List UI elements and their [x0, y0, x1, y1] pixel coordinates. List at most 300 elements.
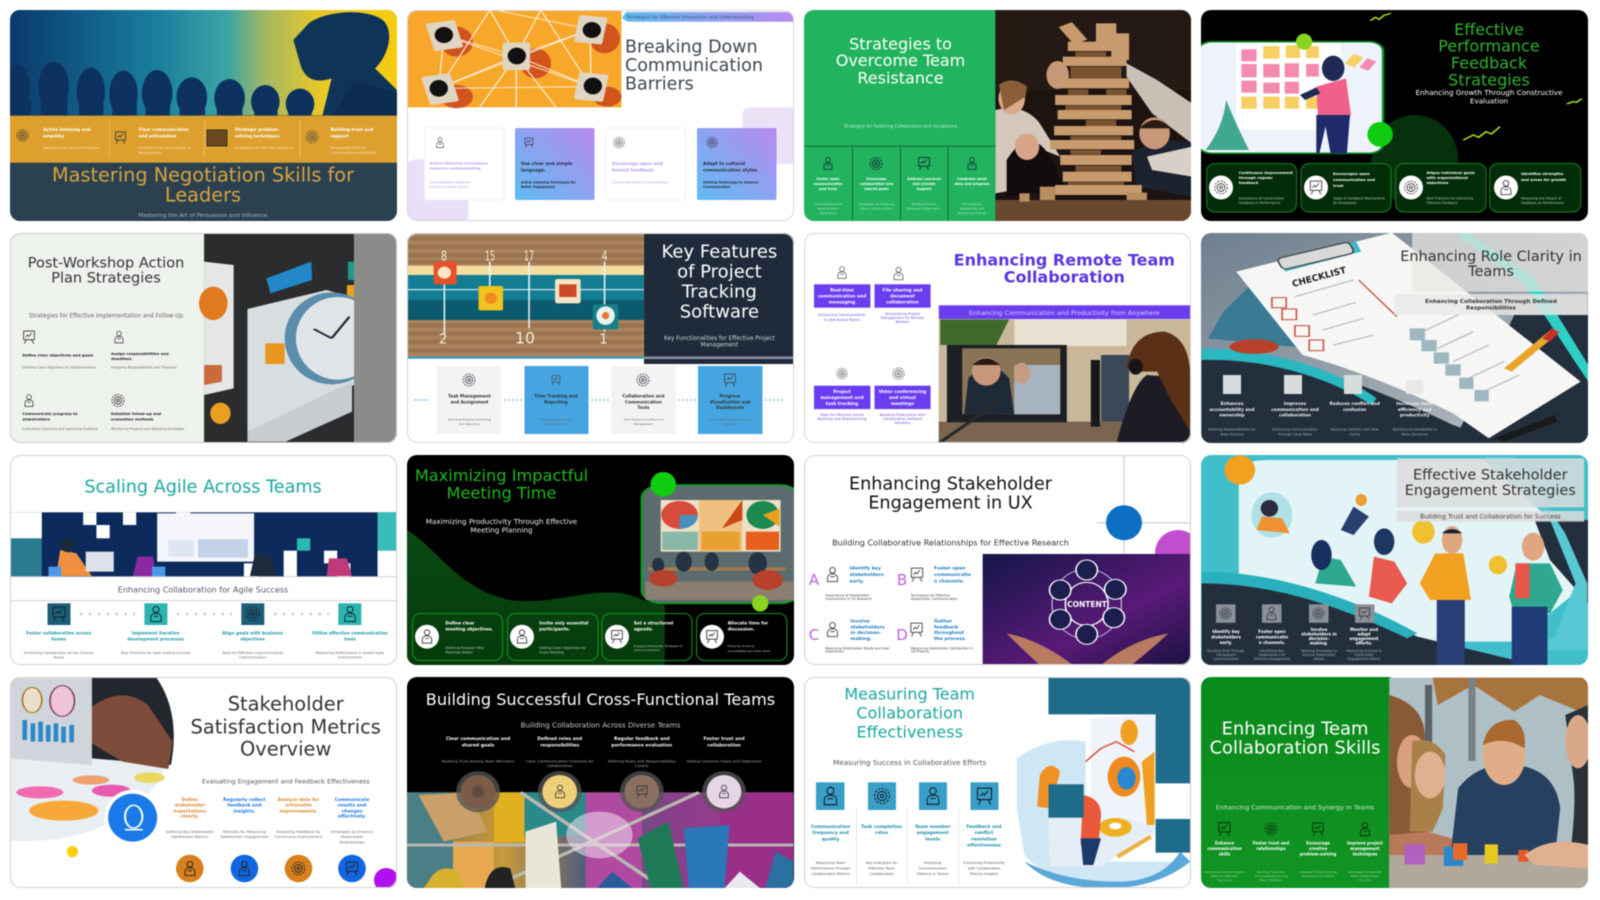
- text: metric subtitles: Effective Team: [868, 866, 895, 870]
- subtitle: Measuring Success in Collaborative Efforts: [833, 758, 986, 767]
- title: Satisfaction Metrics: [191, 715, 381, 738]
- text: practice subtitles: Management for Remote: [881, 316, 924, 320]
- text: metric titles: Team member: [915, 824, 951, 830]
- text: strategy titles: collaboration and: [860, 182, 894, 186]
- text: practice subtitles: [445, 644, 771, 654]
- icons: four metrics: [816, 782, 998, 810]
- subtitle: Enhancing Growth Through Constructive: [1415, 88, 1563, 97]
- text: skill titles: [43, 127, 373, 138]
- card: active listening: [424, 128, 504, 200]
- title: Performance: [1438, 37, 1540, 56]
- text: tactic titles: throughout: [934, 630, 965, 636]
- text: benefit subtitles: Effective Feedback: [1426, 201, 1458, 205]
- text: tactic titles: early.: [850, 578, 864, 584]
- card: honest feedback: [606, 128, 686, 200]
- text: agile step subtitles: [24, 651, 384, 659]
- text: action item titles: deadlines: [111, 356, 132, 361]
- text: strategy titles: support: [917, 187, 932, 191]
- shape: blue circle: [1106, 505, 1142, 540]
- image: team on scaffolding: [407, 771, 793, 889]
- subtitle: Evaluating Engagement and Feedback Effectiveness: [202, 777, 370, 785]
- text: tactic titles: early.: [1220, 640, 1233, 645]
- text: tactic subtitles: Measuring Stakeholder Satisfaction in: [911, 646, 973, 650]
- title: Breaking Down: [625, 38, 758, 58]
- text: strategy titles: shared goals: [864, 187, 889, 191]
- title: [844, 684, 975, 741]
- text: tactic titles: stakeholders in: [1301, 632, 1337, 636]
- text: practice titles: communication and: [818, 294, 866, 300]
- image: isometric clock and calendar: [199, 232, 400, 445]
- letters A B C D: C: [809, 626, 819, 644]
- title: Overcome Team: [836, 51, 965, 70]
- text: feature titles: Dashboards: [716, 405, 745, 410]
- text: agile step subtitles: Best Practices for Agile Scaling Success: [121, 651, 190, 655]
- text: agile step titles: objectives: [240, 636, 265, 642]
- image: person at sticky note board: [1198, 13, 1582, 205]
- text: feature titles: Reporting: [544, 399, 568, 404]
- text: action item titles: Assign responsibilities and: [111, 351, 169, 356]
- text: skill subtitles: Strategies for Win-Win Solutions: [235, 146, 293, 150]
- text: skill titles: Encourage: [1306, 840, 1330, 845]
- card: clear language: Better Engagement: [521, 185, 556, 189]
- text: feature titles: [448, 394, 750, 410]
- title: Collaboration: [856, 703, 963, 722]
- banner: subtitle: [622, 12, 794, 22]
- text: practice titles: and virtual: [889, 395, 916, 401]
- title: [191, 693, 381, 760]
- text: metric titles: conflict: [975, 830, 994, 836]
- panel: Enhancing Stakeholder Engagement in UX: [804, 455, 1201, 666]
- text: metric subtitles: Collaboration Metrics: [812, 872, 850, 876]
- text: skill titles: Clear communication: [139, 127, 189, 132]
- title: Effective Stakeholder: [1413, 467, 1568, 483]
- image: smiley card and sticky notes in circle: [10, 675, 398, 892]
- title: Overview: [240, 737, 331, 760]
- text: practice titles: meetings: [891, 401, 914, 407]
- text: metric titles: engagement: [917, 830, 949, 836]
- text: tactic titles: stakeholders: [850, 624, 885, 630]
- text: benefit subtitles: Best Practices for Delivering: [1426, 196, 1473, 200]
- panel: dark title block: Management: [701, 343, 739, 349]
- text: practice subtitles: Follow-Up: Ensuring: [728, 644, 754, 648]
- icon: graduation cap: [116, 132, 126, 144]
- text: tactic titles: n channels.: [934, 578, 964, 584]
- text: action item subtitles: Defining Clear Objectives for Implementation: [22, 365, 96, 369]
- text: agile step titles: tools: [344, 636, 356, 642]
- text: practice subtitles: Active Involvement: [634, 648, 660, 652]
- card: active listening: Communication Styles: [430, 185, 468, 189]
- text: action item titles: Communicate progress to: [22, 411, 78, 416]
- text: practice titles: task tracking: [826, 401, 858, 407]
- text: benefit subtitles: Boosting Accountability in: [1393, 428, 1437, 432]
- numbers on timeline: 8: [441, 248, 447, 264]
- text: metric titles: [173, 797, 369, 820]
- text: team factor subtitles: Building Trust Among Team Members: [442, 758, 514, 764]
- text: strategy subtitles: Open Communication: [860, 206, 893, 210]
- text: metric subtitles: Collaboration: [870, 872, 894, 876]
- text: benefit titles: [1210, 401, 1434, 419]
- panel: dark title block: [644, 233, 794, 364]
- text: agile step subtitles: Tools for Effective Cross-Functional: [221, 651, 283, 655]
- text: skill subtitles: Building Trust and: [1258, 870, 1285, 874]
- text: strategy titles: wins and progress: [954, 182, 990, 186]
- text: benefit titles: feedback: [1239, 180, 1259, 185]
- text: tactic titles: stakeholders: [850, 572, 884, 578]
- text: skill titles: rapport: [331, 134, 348, 138]
- text: benefit titles: Aligns individual goals: [1426, 170, 1476, 175]
- text: team factor titles: [446, 736, 745, 749]
- icons: four benefits: [1223, 375, 1423, 394]
- title: Resistance: [857, 68, 944, 87]
- title: Engagement Strategies: [1405, 483, 1576, 499]
- text: feature titles: Communication: [625, 399, 662, 404]
- text: practice subtitles: Accountability and Action Items: [728, 649, 771, 653]
- text: benefit subtitles: Clarity: [1349, 433, 1360, 437]
- title: [53, 166, 355, 202]
- text: team factor subtitles: Collaboration: [547, 763, 573, 768]
- image: analytics illustration with blocks: [1017, 678, 1190, 888]
- text: metric subtitles: Analyzing Feedback for: [276, 829, 321, 834]
- letters A B C D: D: [896, 626, 908, 644]
- text: team factor titles: responsibilities: [540, 743, 579, 749]
- subtitle: Building Collaborative Relationships for Effective Research: [832, 538, 1069, 548]
- text: benefit titles: communication and: [1333, 177, 1375, 182]
- image: video call at a desk: [939, 319, 1191, 443]
- card: honest feedback: Encourage open and: [612, 161, 663, 167]
- text: metric titles: actionable: [285, 803, 312, 809]
- text: benefit subtitles: Importance of Constructive: [1239, 196, 1284, 200]
- text: tactic subtitles: Building Trust Through: [1207, 649, 1245, 653]
- image: content cycle over hands: [983, 554, 1192, 666]
- text: tactic titles: communicatio: [1256, 634, 1288, 640]
- text: tactic titles: Involve: [1311, 627, 1328, 632]
- text: tactic subtitles: Transparent: [1215, 653, 1236, 657]
- cards: meeting practices: [412, 614, 787, 660]
- text: practice titles: participants.: [539, 626, 571, 632]
- text: agile step titles: teams: [51, 636, 67, 642]
- text: practice subtitles: Workers: [895, 320, 910, 324]
- image: team at workshop table: [1389, 678, 1591, 890]
- title: Leaders: [165, 184, 241, 207]
- text: skill titles: Foster trust and: [1253, 840, 1289, 845]
- text: metric titles: changes: [341, 808, 363, 814]
- text: feature titles: Tools: [637, 405, 650, 410]
- text: metric titles: results and: [338, 803, 366, 809]
- title: Measuring Team: [844, 684, 975, 703]
- subtitle: Evaluation: [1470, 96, 1508, 105]
- text: strategy titles: Celebrate small: [957, 177, 987, 181]
- panel: Measuring Team Collaboration Effectiveness: [804, 677, 1191, 888]
- text: strategy subtitles: Adaptability and: [960, 206, 984, 210]
- text: skill subtitles: [1204, 870, 1382, 882]
- title: Collaboration: [1004, 267, 1125, 286]
- title: [1405, 467, 1576, 499]
- numbers on timeline: 15: [485, 248, 495, 264]
- subtitle: Enhancing Collaboration Through Defined: [1425, 299, 1557, 305]
- text: benefit subtitles: Types of Feedback Mechanisms: [1332, 196, 1385, 200]
- panel: dark title block: Software: [680, 301, 759, 322]
- text: tactic subtitles: Techniques for Effective: [910, 594, 950, 598]
- text: tactic titles: feedback: [934, 624, 959, 630]
- card: active listening: Active listening techniques: [430, 160, 489, 165]
- text: practice subtitles: Setting Clear Objectives for: [539, 646, 587, 650]
- text: benefit titles: Increases team: [1396, 401, 1434, 407]
- subtitle: Mastering the Art of Persuasion and Influence: [139, 213, 268, 219]
- text: tactic subtitles: UX Projects: [911, 650, 930, 654]
- text: practice titles: collaboration: [886, 300, 919, 306]
- text: strategy titles: Encourage: [866, 177, 887, 181]
- text: metric subtitles: Continuous Improvement: [274, 834, 323, 839]
- text: practice subtitles: Boosting Productivity with: [880, 413, 925, 417]
- card: cultural styles: Communication: [703, 185, 730, 189]
- text: strategy titles: communication: [813, 182, 843, 186]
- text: metric titles: expectations: [173, 808, 206, 814]
- image: clipboard checklist: [1202, 233, 1588, 443]
- text: tactic titles: Gather: [934, 618, 953, 624]
- text: metric titles: clearly.: [181, 814, 199, 820]
- text: benefit subtitles: Through Clear Roles: [1277, 433, 1312, 437]
- panel: Building Successful Cross-Functional Teams: [407, 677, 794, 889]
- text: agile step titles: development processes: [127, 636, 184, 642]
- numbers on timeline: 1: [599, 332, 608, 348]
- text: feature subtitles: Real-time Progress Monitoring: [448, 418, 491, 422]
- text: skill titles: and articulation: [139, 134, 176, 138]
- text: feature subtitles: Customizable Dashboards and: [708, 418, 752, 422]
- image: connected speech bubble blocks: [407, 10, 621, 108]
- text: metric subtitles: Enhancing Productivity: [963, 861, 1006, 865]
- text: metric titles: frequency and: [812, 830, 849, 836]
- title: Enhancing Team: [1222, 718, 1368, 739]
- text: practice titles: messaging: [829, 300, 855, 306]
- text: practice subtitles: Tools for Effective Virtual: [819, 413, 864, 417]
- text: metric subtitles: [811, 861, 1006, 876]
- text: skill titles: Enhance: [1215, 840, 1234, 845]
- subtitle: [1425, 299, 1557, 312]
- numbers on timeline: 17: [524, 248, 534, 264]
- text: metric titles: Feedback and: [966, 824, 1002, 830]
- text: metric subtitles: [166, 829, 374, 844]
- text: benefit subtitles: [1239, 196, 1564, 205]
- text: practice titles: discussion.: [728, 626, 755, 632]
- text: metric titles: Analyze data for: [278, 797, 320, 803]
- text: tactic subtitles: Identifying Key: [1260, 649, 1284, 653]
- text: action item subtitles: Monitoring Progress and Adjusting Strategies: [111, 427, 185, 431]
- text: strategy subtitles: [814, 202, 986, 215]
- text: benefit titles: trust: [1333, 183, 1344, 188]
- icon: magnifier: [17, 130, 28, 141]
- text: practice subtitles: Meetings and Brainstorming: [817, 417, 867, 421]
- text: skill subtitles: Skills for Effective: [1211, 874, 1238, 878]
- text: skill titles: Strategic problem-: [235, 127, 280, 132]
- text: tactic titles: decision-: [1309, 636, 1330, 641]
- title: [836, 34, 965, 87]
- title: Stakeholder: [228, 693, 344, 716]
- text: metric subtitles: Key Indicators for: [866, 861, 898, 865]
- text: tactic titles: [1211, 627, 1379, 646]
- text: action item subtitles: Evaluating Outcomes and Gathering Feedback: [22, 427, 98, 431]
- text: benefit subtitles: Enhancing Communication: [1272, 428, 1318, 432]
- text: agile step titles: Align goals with business: [222, 630, 284, 636]
- text: benefit subtitles: Team Success: [1219, 433, 1244, 437]
- text: tactic titles: adapt: [1357, 632, 1371, 636]
- icons: four agile steps: [48, 603, 361, 625]
- text: practice subtitles: Every Meeting: [539, 650, 564, 654]
- text: benefit subtitles: for Employees: [1333, 201, 1357, 205]
- text: metric titles: Task completion: [861, 824, 902, 830]
- text: skill subtitles: Building Trust and Rapport in: [139, 146, 191, 150]
- title: Barriers: [625, 74, 694, 94]
- text: benefit subtitles: Feedback on Performance: [1521, 201, 1564, 205]
- text: metric subtitles: Stakeholder: [341, 834, 364, 839]
- title: [849, 474, 1053, 513]
- text: action item subtitles: Assigning Responsibilities and Timelines: [111, 365, 177, 369]
- title: Enhancing Stakeholder: [849, 474, 1053, 494]
- icons: four tactics: [1216, 604, 1374, 623]
- text: agile step subtitles: Enhancing Collaboration Across Diverse: [24, 651, 94, 655]
- numbers on timeline: 4: [602, 248, 608, 264]
- text: benefit titles: productivity: [1400, 413, 1430, 419]
- text: tactic subtitles: [826, 594, 973, 654]
- text: agile step titles: Utilize effective communication: [312, 630, 388, 636]
- subtitle: Maximizing Productivity Through Effective: [426, 517, 578, 526]
- text: feature titles: and Assignment: [450, 399, 488, 404]
- text: strategy titles: and trust: [819, 187, 837, 191]
- text: practice subtitles: Meetings Matter: [445, 650, 474, 654]
- text: tactic titles: Identify key: [1212, 629, 1240, 634]
- text: skill titles: techniques: [1353, 852, 1378, 857]
- text: strategy subtitles: Strategies for Fostering: [859, 202, 894, 206]
- text: team factor titles: collaboration: [707, 743, 741, 749]
- connectors: [414, 399, 783, 401]
- text: practice titles: File sharing and: [883, 288, 922, 294]
- text: skill titles: creative: [1309, 846, 1327, 851]
- text: tactic titles: engagement: [1349, 636, 1379, 641]
- text: tactic titles: stakeholders: [1211, 634, 1241, 640]
- text: benefit subtitles: Defining Responsibilities for: [1208, 428, 1256, 432]
- text: skill titles: communication: [1207, 846, 1242, 851]
- text: practice subtitles: Enhancing Communication: [818, 313, 866, 317]
- text: tactic subtitles: Effective Engagement: [1254, 657, 1291, 661]
- image: business people shaking hands: [1202, 455, 1588, 665]
- text: strategy titles: and provide: [913, 182, 936, 186]
- icons: four skills: [1219, 822, 1370, 836]
- icon: gear: [306, 131, 318, 143]
- letters A B C D: B: [897, 571, 907, 589]
- numbers on timeline: 2: [439, 332, 447, 348]
- text: skill titles: Building trust and: [331, 127, 373, 132]
- panel: Mastering Negotiation Skills for Leaders: [6, 10, 398, 221]
- text: benefit subtitles: [1208, 428, 1437, 437]
- text: agile step subtitles: Environments: [338, 655, 362, 659]
- card: clear language: language.: [521, 168, 546, 174]
- text: feature subtitles: and Reporting: [459, 422, 480, 426]
- text: team factor subtitles: Clear Communication Channels for: [526, 758, 594, 764]
- icons: four team badges: [472, 785, 728, 798]
- panel: Strategies to Overcome Team Resistance: [804, 10, 1192, 222]
- subtitle: Building Trust and Collaboration for Success: [1420, 512, 1561, 520]
- text: tactic subtitles: Measuring Success in: [1346, 649, 1382, 653]
- card: cultural styles: Adapt to cultural: [703, 161, 746, 167]
- icons: four tactics: [828, 567, 923, 637]
- subtitle: Enhancing Communication and Synergy in Teams: [1216, 804, 1375, 812]
- text: skill subtitles: Conversations Effectively: [331, 151, 377, 155]
- text: agile step subtitles: Teams: [52, 655, 64, 659]
- subtitle: Strategies for Effective Implementation and Follow-Up: [29, 313, 184, 319]
- text: agile step titles: [26, 630, 388, 642]
- subtitle: Strategies for Fostering Collaboration and Acceptance: [844, 124, 958, 128]
- text: tactic titles: Involve: [850, 618, 870, 624]
- text: strategy titles: Address concerns: [907, 177, 941, 181]
- text: benefit subtitles: Team Dynamics: [1400, 433, 1428, 437]
- text: skill subtitles: Team Members: [1259, 878, 1283, 882]
- text: team factor titles: Regular feedback and: [614, 736, 670, 742]
- text: team factor subtitles: [442, 758, 762, 768]
- text: metric titles: insights.: [233, 808, 256, 814]
- panel: Maximizing Impactful Meeting Time: [407, 455, 800, 667]
- text: benefit titles: through regular: [1239, 175, 1273, 180]
- text: tactic subtitles: Involvement in UX Research: [826, 597, 872, 601]
- text: skill subtitles: Mastering the Art of Persuasion: [43, 146, 100, 150]
- title: [1438, 20, 1540, 90]
- title: [28, 255, 184, 286]
- text: tactic titles: Foster open: [1258, 629, 1286, 634]
- text: tactic subtitles: Needs: [1314, 657, 1324, 661]
- text: benefit titles: objectives: [1426, 180, 1449, 185]
- letters A B C D: A: [809, 571, 820, 589]
- text: strategy titles: [813, 177, 990, 191]
- text: metric titles: Communication: [811, 824, 850, 830]
- text: benefit titles: with organizational: [1426, 175, 1468, 180]
- text: strategy subtitles: Encouraging: [963, 202, 981, 206]
- text: tactic titles: in decision-: [850, 630, 881, 636]
- text: metric titles: Define: [182, 797, 198, 803]
- text: skill subtitles: [43, 146, 377, 155]
- text: skill subtitles: Navigating Difficult: [331, 146, 366, 150]
- text: skill subtitles: Negotiations: [139, 151, 162, 155]
- icons: four strategies: [824, 158, 976, 170]
- title: Communication: [625, 56, 763, 76]
- text: metric titles: improvements.: [279, 808, 318, 814]
- text: skill titles: empathy: [43, 134, 64, 138]
- text: metric titles: rates: [875, 830, 888, 836]
- text: metric subtitles: Metrics Insights: [970, 872, 998, 876]
- text: practice subtitles: [817, 312, 925, 425]
- title: Engagement in UX: [868, 493, 1033, 513]
- text: benefit titles: Identifies strengths: [1521, 171, 1564, 176]
- text: action item titles: Establish follow-up and: [111, 411, 161, 416]
- panel: dark title block: of Project: [677, 261, 762, 282]
- title: Post-Workshop Action: [28, 255, 184, 271]
- text: tactic subtitles: Experience: [826, 650, 844, 654]
- text: tactic subtitles: Importance of Stakeholder: [826, 594, 870, 598]
- text: benefit subtitles: Reducing Conflicts with Role: [1331, 428, 1379, 432]
- text: agile step titles: Foster collaboration across: [26, 630, 92, 636]
- panel: Post-Workshop Action Plan Strategies: [10, 232, 400, 445]
- text: benefit titles: Reduces conflict and: [1329, 401, 1380, 407]
- text: benefit titles: Encourages open: [1333, 171, 1370, 176]
- card: clear language: Use clear and simple: [521, 161, 573, 167]
- banner: subtitle: Enhancing Communication and Productivity from Anywhere: [969, 309, 1160, 317]
- letters A B C D: [809, 571, 908, 644]
- title: Building Successful Cross-Functional Teams: [426, 690, 775, 709]
- text: metric subtitles: Stakeholder Engagement: [220, 834, 269, 839]
- text: metric subtitles: Defining Key Stakeholder: [166, 829, 214, 834]
- panel: Effective Performance Feedback Strategies: [1198, 10, 1588, 221]
- text: tactic subtitles: Communication: [1213, 657, 1239, 661]
- text: CONTENT label: CONTENT: [1067, 600, 1108, 609]
- panel: Effective Stakeholder Engagement Strategies: [1201, 455, 1588, 665]
- text: feature titles: Time Tracking and: [534, 394, 578, 399]
